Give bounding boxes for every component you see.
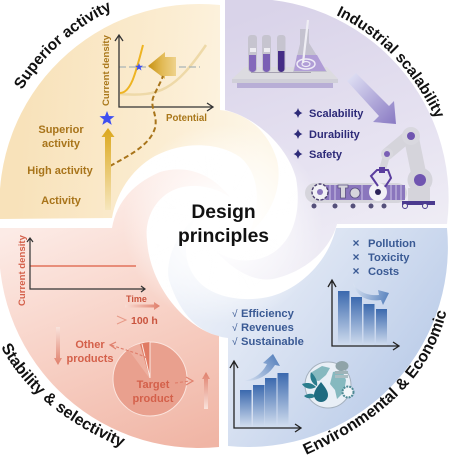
chart: current density over time [27, 238, 145, 292]
list: reductions: × [352, 264, 360, 278]
list: benefits: √ [232, 336, 238, 348]
panel: industrial scalability content [232, 6, 444, 209]
list: reductions: Toxicity [368, 252, 410, 264]
heading: industrial scalability: Industrial scalability [336, 6, 444, 116]
list: scalability features [294, 108, 364, 161]
list: scalability features: Safety [309, 149, 343, 161]
labels: activity levels: High activity [27, 165, 94, 177]
arrow: other products decrease [54, 327, 62, 365]
list: reductions: × [352, 250, 360, 264]
list: benefits [232, 308, 304, 348]
panel: superior activity background [0, 4, 279, 232]
arrow: dashed link [110, 76, 163, 166]
bar chart: falling [328, 280, 399, 350]
title: design principles: Design [191, 202, 256, 223]
labels: products: products [66, 353, 114, 365]
arrow: target product increase [202, 372, 210, 409]
heading: environmental and economic: Environmental & Economic [302, 310, 446, 454]
arrow: time [125, 302, 160, 310]
arrow: activity rising [102, 128, 114, 210]
labels: activity levels: Activity [41, 195, 82, 207]
icon: conveyor and robot arm [305, 127, 435, 208]
icon: lab glassware [232, 20, 338, 88]
labels: products: Other [75, 339, 105, 351]
list: benefits: Revenues [241, 322, 294, 334]
center swirl fade [123, 124, 323, 324]
title: design principles [178, 202, 269, 247]
labels: activity levels: Superior [38, 124, 84, 136]
title: design principles: principles [178, 226, 269, 247]
labels: activity levels: activity [42, 138, 81, 150]
labels: products: product [133, 393, 174, 405]
heading: superior activity: Superior activity [14, 2, 110, 88]
chart: polarization curves [115, 35, 213, 111]
panel: stability and selectivity background [0, 169, 230, 448]
label: over 100 h: 100 h [131, 315, 158, 327]
arrows: pie callouts [110, 342, 193, 385]
label: current density: Current density [101, 34, 112, 106]
heading: stability and selectivity: Stability & selectivity [2, 343, 126, 448]
list: reductions: Pollution [368, 238, 416, 250]
list: reductions: × [352, 236, 360, 250]
list: benefits: Efficiency [241, 308, 295, 320]
panel: environmental and economic background [168, 217, 448, 447]
labels: activity levels [27, 124, 94, 207]
arrow: shift left [148, 52, 176, 79]
list: reductions [352, 236, 416, 278]
icon: small star [135, 63, 143, 71]
panel: stability and selectivity content [2, 234, 210, 448]
arrow: scale up [347, 73, 396, 124]
list: scalability features: Scalability [309, 108, 364, 120]
chart: product selectivity pie [113, 342, 187, 416]
labels: products: Target [137, 379, 170, 391]
list: reductions: Costs [368, 266, 399, 278]
icon: large star [100, 111, 114, 125]
icon: globe with coins, gear and leaves [302, 361, 354, 408]
labels: products [66, 339, 174, 405]
list: benefits: √ [232, 322, 238, 334]
label: time: Time [126, 294, 147, 304]
list: scalability features: Durability [309, 129, 361, 141]
label: current density: Current density [17, 234, 28, 306]
label: over 100 h [117, 315, 158, 327]
bar chart: rising [230, 354, 301, 432]
panel: superior activity content [14, 2, 214, 210]
panel: industrial scalability background [216, 0, 449, 280]
label: potential: Potential [166, 113, 207, 124]
list: benefits: √ [232, 308, 238, 320]
list: benefits: Sustainable [241, 336, 304, 348]
panel: environmental and economic content [230, 236, 446, 454]
